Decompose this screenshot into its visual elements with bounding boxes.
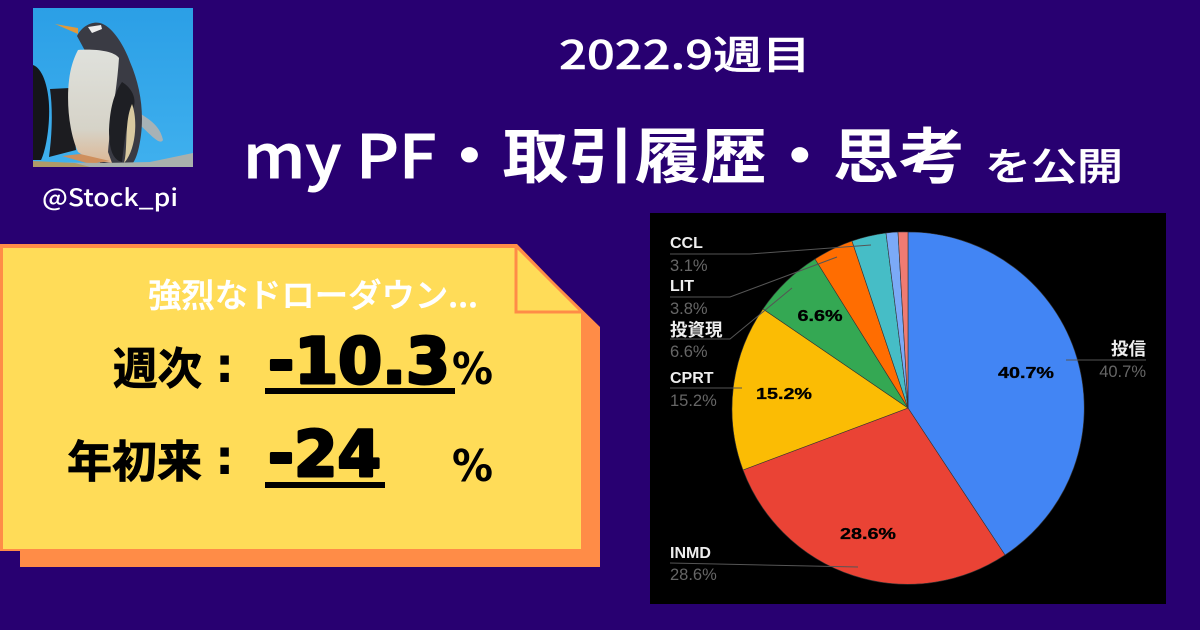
leader lines	[670, 245, 1146, 567]
legend: CPRT	[670, 370, 717, 410]
legend: CPRT: CPRT	[670, 370, 714, 387]
year-to-date value: -24	[268, 418, 381, 491]
slice value labels: 40.7%	[998, 365, 1054, 382]
legend: 投信	[1099, 336, 1146, 381]
heading: main title: を公開	[985, 136, 1123, 191]
legend: INMD: INMD	[670, 545, 711, 562]
legend: 投資現: 投資現	[670, 317, 723, 342]
legend: INMD: 28.6%	[670, 566, 717, 584]
legend: 投資現	[670, 317, 723, 361]
year-to-date value	[265, 418, 493, 492]
icon: penguin avatar	[33, 8, 193, 167]
legend: INMD	[670, 545, 717, 584]
slice value labels	[756, 308, 1054, 543]
legend: CCL: 3.1%	[670, 257, 708, 275]
legend: LIT	[670, 278, 708, 318]
handle text: @Stock_pi	[42, 178, 178, 213]
legend: LIT: LIT	[670, 278, 694, 295]
weekly value: %	[452, 344, 493, 395]
legend: 投信: 投信	[1111, 336, 1146, 361]
legend: LIT: 3.8%	[670, 300, 708, 318]
panel: portfolio pie chart	[650, 213, 1166, 604]
year-to-date label: 年初来	[67, 426, 202, 490]
slice value labels: 28.6%	[840, 526, 896, 543]
legend: CPRT: 15.2%	[670, 392, 717, 410]
heading: main title: my PF ・取引履歴・思考	[243, 109, 965, 196]
slice value labels: 6.6%	[798, 308, 842, 325]
year-to-date value: %	[452, 441, 493, 492]
legend: CCL: CCL	[670, 235, 703, 252]
subtitle: 強烈なドローダウン...	[148, 269, 478, 317]
pie slices	[732, 232, 1084, 584]
slice value labels: 15.2%	[756, 386, 812, 403]
weekly label: :	[215, 338, 234, 394]
panel: performance note	[0, 244, 600, 567]
heading: week: 2022.9週目	[559, 25, 811, 81]
weekly label: 週次	[113, 333, 202, 397]
weekly value: -10.3	[268, 325, 450, 398]
legend: 投信: 40.7%	[1099, 363, 1146, 381]
legend: CCL	[670, 235, 708, 275]
year-to-date label: :	[215, 430, 234, 486]
legend: 投資現: 6.6%	[670, 343, 708, 361]
